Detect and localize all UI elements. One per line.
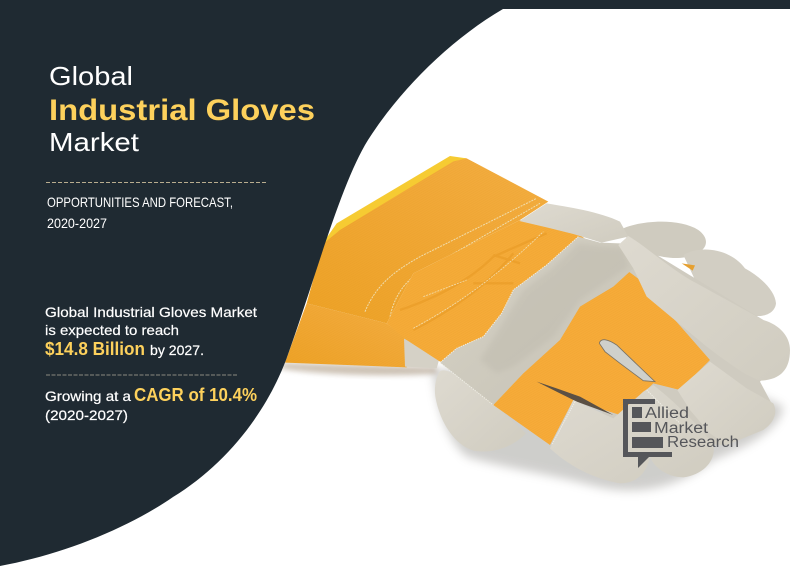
finger base silhouette	[580, 237, 787, 445]
finger three	[550, 385, 714, 483]
market size callout: by 2027.	[150, 342, 204, 358]
cuff stitching	[365, 198, 540, 317]
finger gap slit	[599, 340, 655, 382]
lower gap shadow	[537, 382, 613, 415]
logo wordmark: Allied	[645, 405, 689, 422]
subtitle: opportunities and forecast	[47, 194, 233, 231]
logo wordmark: Market	[654, 420, 709, 437]
market value: $14.8 Billion	[45, 338, 145, 359]
finger one	[618, 236, 790, 381]
upper cuff	[307, 157, 548, 323]
CAGR value: CAGR of 10.4%	[134, 384, 257, 405]
cuff yellow trim	[322, 156, 467, 245]
lower cuff	[285, 303, 408, 367]
market size callout: Global Industrial Gloves Market	[45, 304, 257, 320]
market size callout: is expected to reach	[45, 322, 179, 338]
leather band: top knuckle	[519, 203, 628, 243]
subtitle: opportunities and forecast: OPPORTUNITIES AND FORECAST,	[47, 194, 233, 210]
logo: Allied Market Research watermark	[623, 399, 739, 468]
finger two tip	[677, 362, 775, 445]
CAGR callout	[45, 384, 257, 423]
logo wordmark: Research	[667, 434, 739, 451]
title line: Industrial Gloves: Industrial Gloves	[49, 94, 315, 127]
logo wordmark	[645, 405, 739, 451]
photo: industrial work gloves	[280, 156, 790, 490]
body wrinkles	[400, 233, 547, 330]
cuff underside shadow	[280, 363, 437, 375]
market size callout	[45, 304, 257, 359]
title line: Market: Market	[49, 127, 140, 157]
logo icon	[623, 399, 672, 468]
inner leather strip	[404, 339, 440, 368]
glove shadow	[280, 367, 783, 490]
subtitle: opportunities and forecast: 2020-2027	[47, 215, 107, 231]
title	[49, 61, 315, 157]
CAGR callout: Growing at a	[45, 388, 131, 404]
title line: Global: Global	[49, 61, 133, 91]
orange glove body	[387, 220, 710, 445]
leather band: diagonal palm	[440, 237, 633, 405]
CAGR callout: (2020-2027)	[45, 407, 128, 423]
back fingers	[623, 222, 776, 316]
thumb	[435, 370, 526, 451]
